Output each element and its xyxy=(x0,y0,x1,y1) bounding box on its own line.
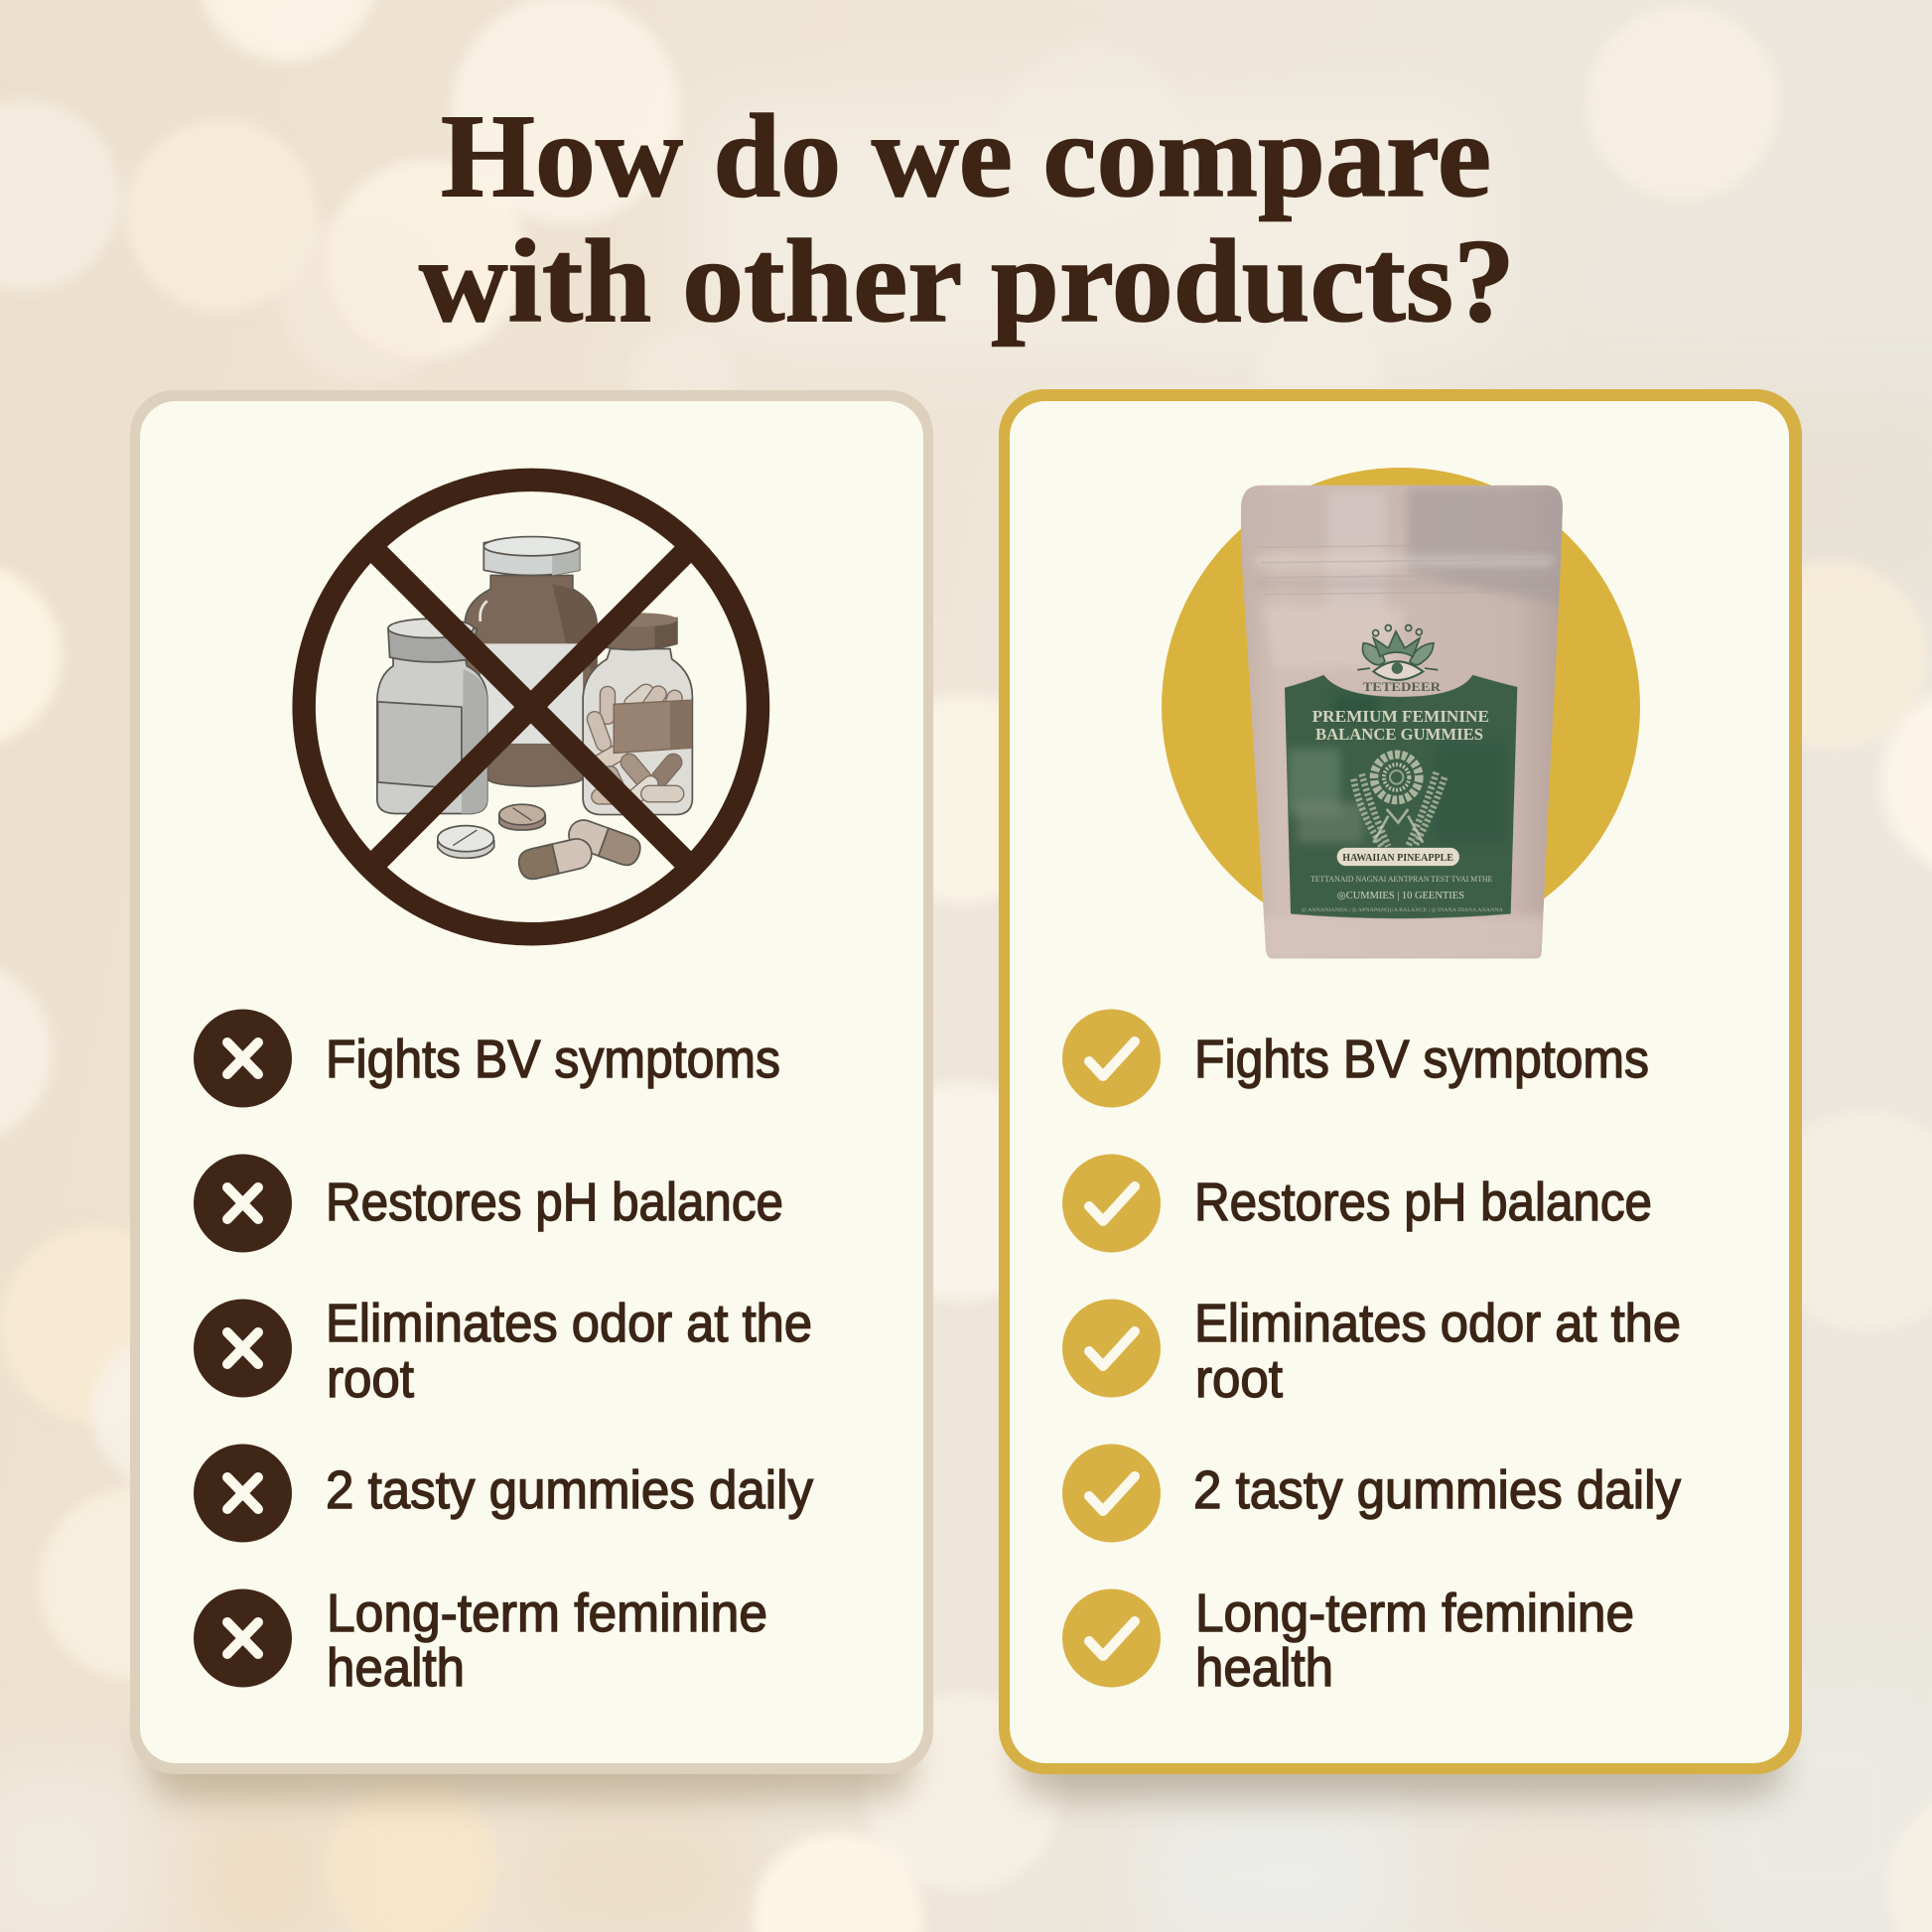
loose tablets and capsules xyxy=(438,804,644,882)
title xyxy=(419,89,1515,346)
row: Long-term feminine health (no): Long-term feminine xyxy=(327,1584,767,1643)
icon: crossed-out supplement bottles xyxy=(304,480,759,934)
row: Restores pH balance (yes): Restores pH balance xyxy=(1194,1173,1652,1232)
brand logo: TETEDEER xyxy=(1363,680,1442,694)
green label: PREMIUM FEMININE xyxy=(1312,707,1489,726)
row: Eliminates odor at the root (no) xyxy=(194,1294,812,1409)
row: 2 tasty gummies daily (no) xyxy=(194,1444,813,1543)
row: Eliminates odor at the root (yes) xyxy=(1062,1294,1681,1409)
panel: other products xyxy=(130,390,933,1799)
panel: our product xyxy=(999,389,1802,1799)
row: Fights BV symptoms (no): Fights BV symptoms xyxy=(326,1030,780,1089)
row: Restores pH balance (yes) xyxy=(1062,1154,1652,1253)
green label: ◎ ANNANIANDA | ◎ APNAPANQUA BALANCE | ◎ INANA DIANA ANANNA xyxy=(1302,907,1503,913)
row: Restores pH balance (no): Restores pH balance xyxy=(326,1173,783,1232)
green label xyxy=(1285,675,1517,918)
row: Restores pH balance (no) xyxy=(194,1154,783,1253)
green label: ◎CUMMIES | 10 GEENTIES xyxy=(1337,891,1464,901)
green label: TETTANAID NAGNAI AENTPRAN TEST TVAI MTHE xyxy=(1311,874,1492,884)
prohibition sign xyxy=(304,480,759,934)
left grey bottle xyxy=(377,619,487,814)
pouch shading xyxy=(1241,487,1566,960)
row: 2 tasty gummies daily (yes): 2 tasty gummies daily xyxy=(1193,1460,1681,1520)
title: with other products? xyxy=(419,214,1515,346)
row: Eliminates odor at the root (yes): root xyxy=(1195,1349,1283,1409)
product pouch xyxy=(1241,485,1566,960)
gold circle behind pouch xyxy=(1162,468,1640,946)
row: Eliminates odor at the root (no): root xyxy=(327,1349,414,1409)
botanical mandala artwork xyxy=(1353,755,1445,846)
row: Long-term feminine health (no) xyxy=(194,1584,767,1698)
green label: BALANCE GUMMIES xyxy=(1315,725,1483,744)
right glass bottle with capsules xyxy=(583,613,692,815)
row: Eliminates odor at the root (no): Eliminates odor at the xyxy=(326,1294,812,1353)
title: How do we compare xyxy=(441,89,1491,221)
row: Long-term feminine health (yes): health xyxy=(1195,1638,1333,1698)
row: Long-term feminine health (yes): Long-term feminine xyxy=(1195,1584,1634,1643)
row: Fights BV symptoms (no) xyxy=(194,1009,780,1108)
brand logo xyxy=(1357,624,1442,694)
row: 2 tasty gummies daily (yes) xyxy=(1062,1444,1681,1543)
row: Fights BV symptoms (yes) xyxy=(1062,1009,1649,1108)
row: Fights BV symptoms (yes): Fights BV symptoms xyxy=(1194,1030,1649,1089)
center brown bottle xyxy=(465,537,597,786)
flavor pill: HAWAIIAN PINEAPPLE xyxy=(1342,853,1453,864)
row: Long-term feminine health (yes) xyxy=(1062,1584,1634,1698)
row: Eliminates odor at the root (yes): Eliminates odor at the xyxy=(1194,1294,1681,1353)
row: Long-term feminine health (no): health xyxy=(327,1638,465,1698)
row: 2 tasty gummies daily (no): 2 tasty gummies daily xyxy=(326,1460,813,1520)
flavor pill xyxy=(1337,848,1459,866)
